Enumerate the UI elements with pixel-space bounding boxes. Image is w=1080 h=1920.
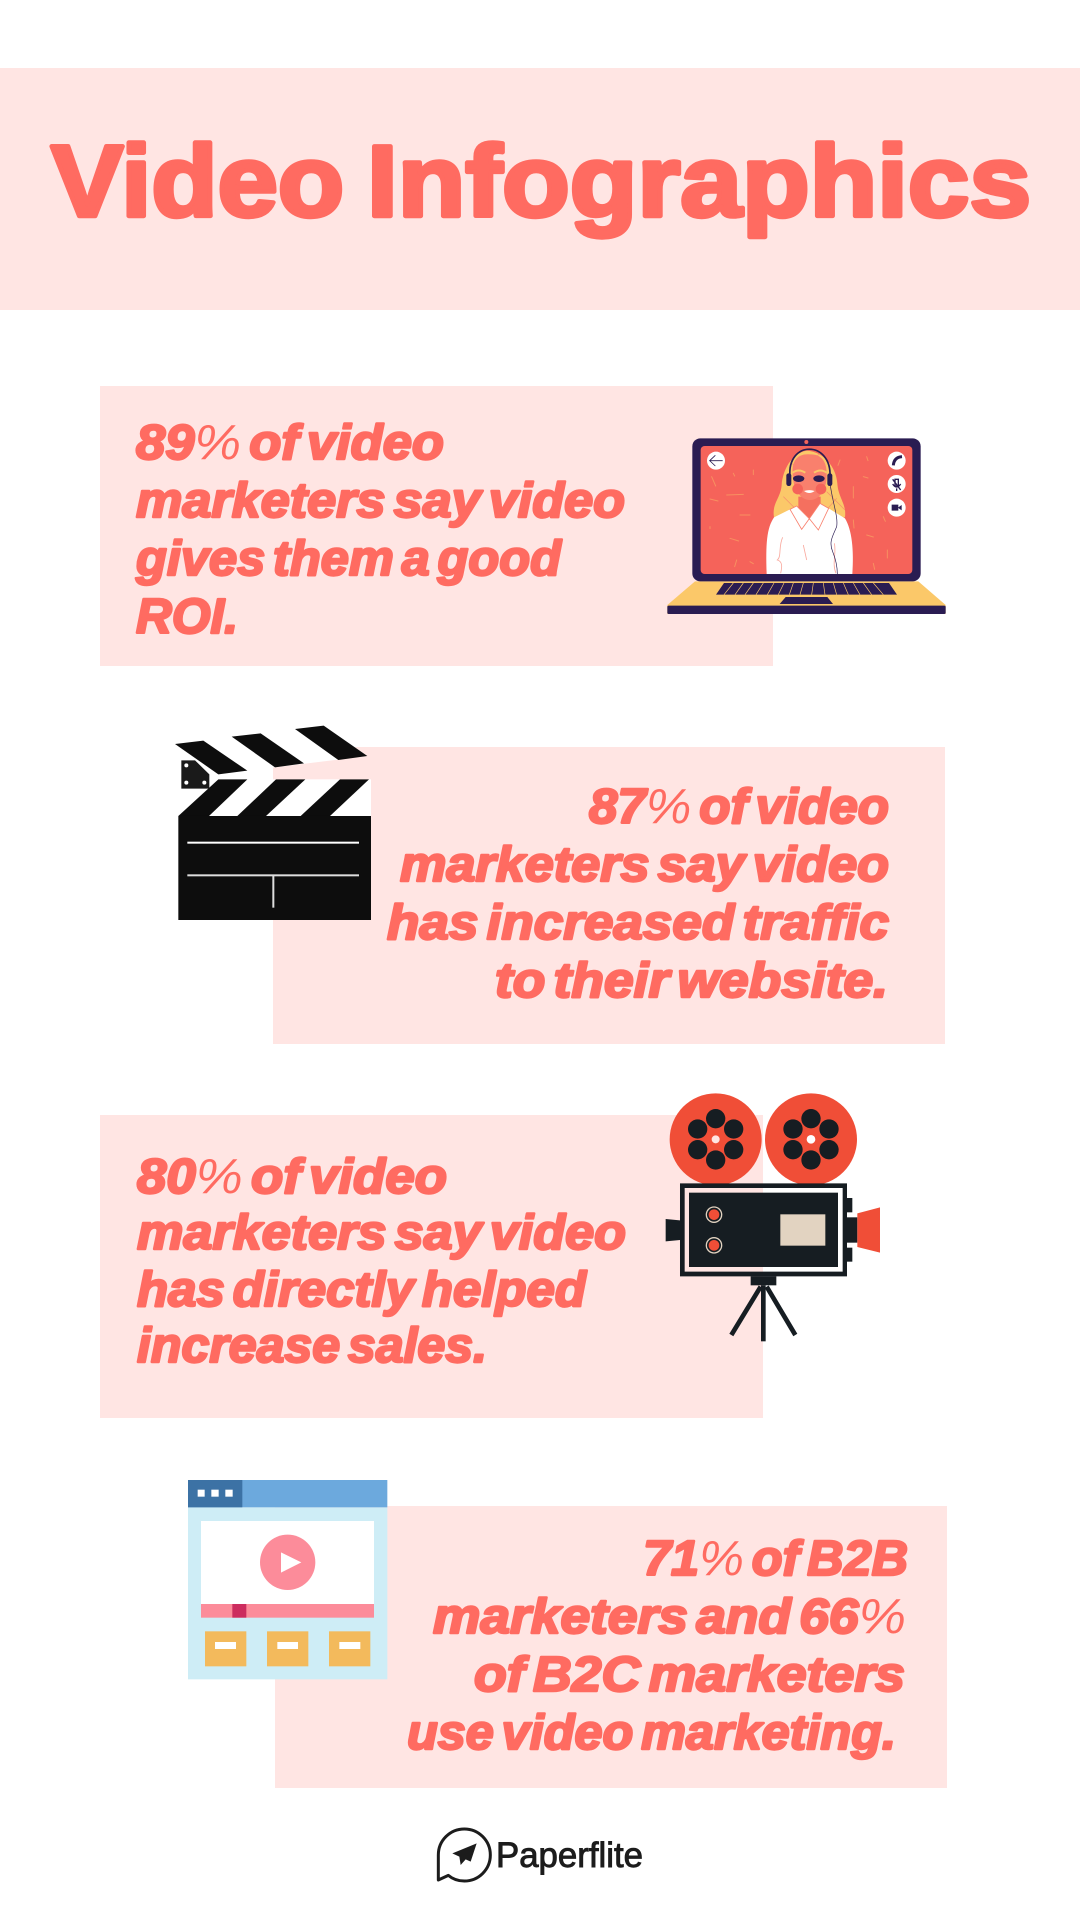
title banner [0, 68, 1080, 310]
logo wordmark: Paperflite [496, 1836, 643, 1875]
stat text: 80%: 80% of video [137, 1150, 447, 1204]
panel: 87% traffic [273, 747, 945, 1044]
logo: Paperflite [438, 1829, 643, 1881]
icon: laptop video call [667, 438, 946, 614]
title: Video [51, 126, 344, 238]
stat text: 71% / 66%: marketers and 66 % [433, 1590, 906, 1644]
stat text: 89% [135, 416, 625, 644]
stat text: 80%: increase sales. [137, 1319, 487, 1373]
stat text: 80%: marketers say video [137, 1206, 626, 1260]
stat text: 87%: marketers say video [400, 838, 889, 892]
stat text: 87% [387, 780, 889, 1008]
stat text: 80%: has directly helped [137, 1263, 587, 1317]
stat text: 71% / 66% [407, 1532, 908, 1760]
panel: 80% sales [100, 1115, 763, 1418]
stat text: 71% / 66%: use video marketing. [407, 1706, 896, 1760]
icon: video player window [188, 1480, 387, 1679]
stat text: 89%: ROI. [136, 590, 238, 644]
icon: film camera on tripod [666, 1093, 880, 1341]
panel: 71% and 66% usage [275, 1506, 947, 1788]
icon: film clapperboard [175, 726, 371, 920]
panel: 89% ROI [100, 386, 773, 666]
stat text: 71% / 66%: of B2C marketers [474, 1648, 905, 1702]
title [51, 126, 1031, 238]
stat text: 89%: 89% of video [136, 416, 444, 470]
stat text: 89%: marketers say video [136, 474, 625, 528]
stat text: 89%: gives them a good [135, 532, 562, 586]
stat text: 87%: to their website. [495, 954, 888, 1008]
stat text: 87%: 87% of video [589, 780, 889, 834]
stat text: 87%: has increased traffic [387, 896, 889, 950]
stat text: 80% [137, 1150, 626, 1373]
logo mark: speech bubble with paper plane [438, 1829, 490, 1881]
title: Infographics [367, 126, 1031, 238]
stat text: 71% / 66%: 71% of B2B [643, 1532, 908, 1586]
